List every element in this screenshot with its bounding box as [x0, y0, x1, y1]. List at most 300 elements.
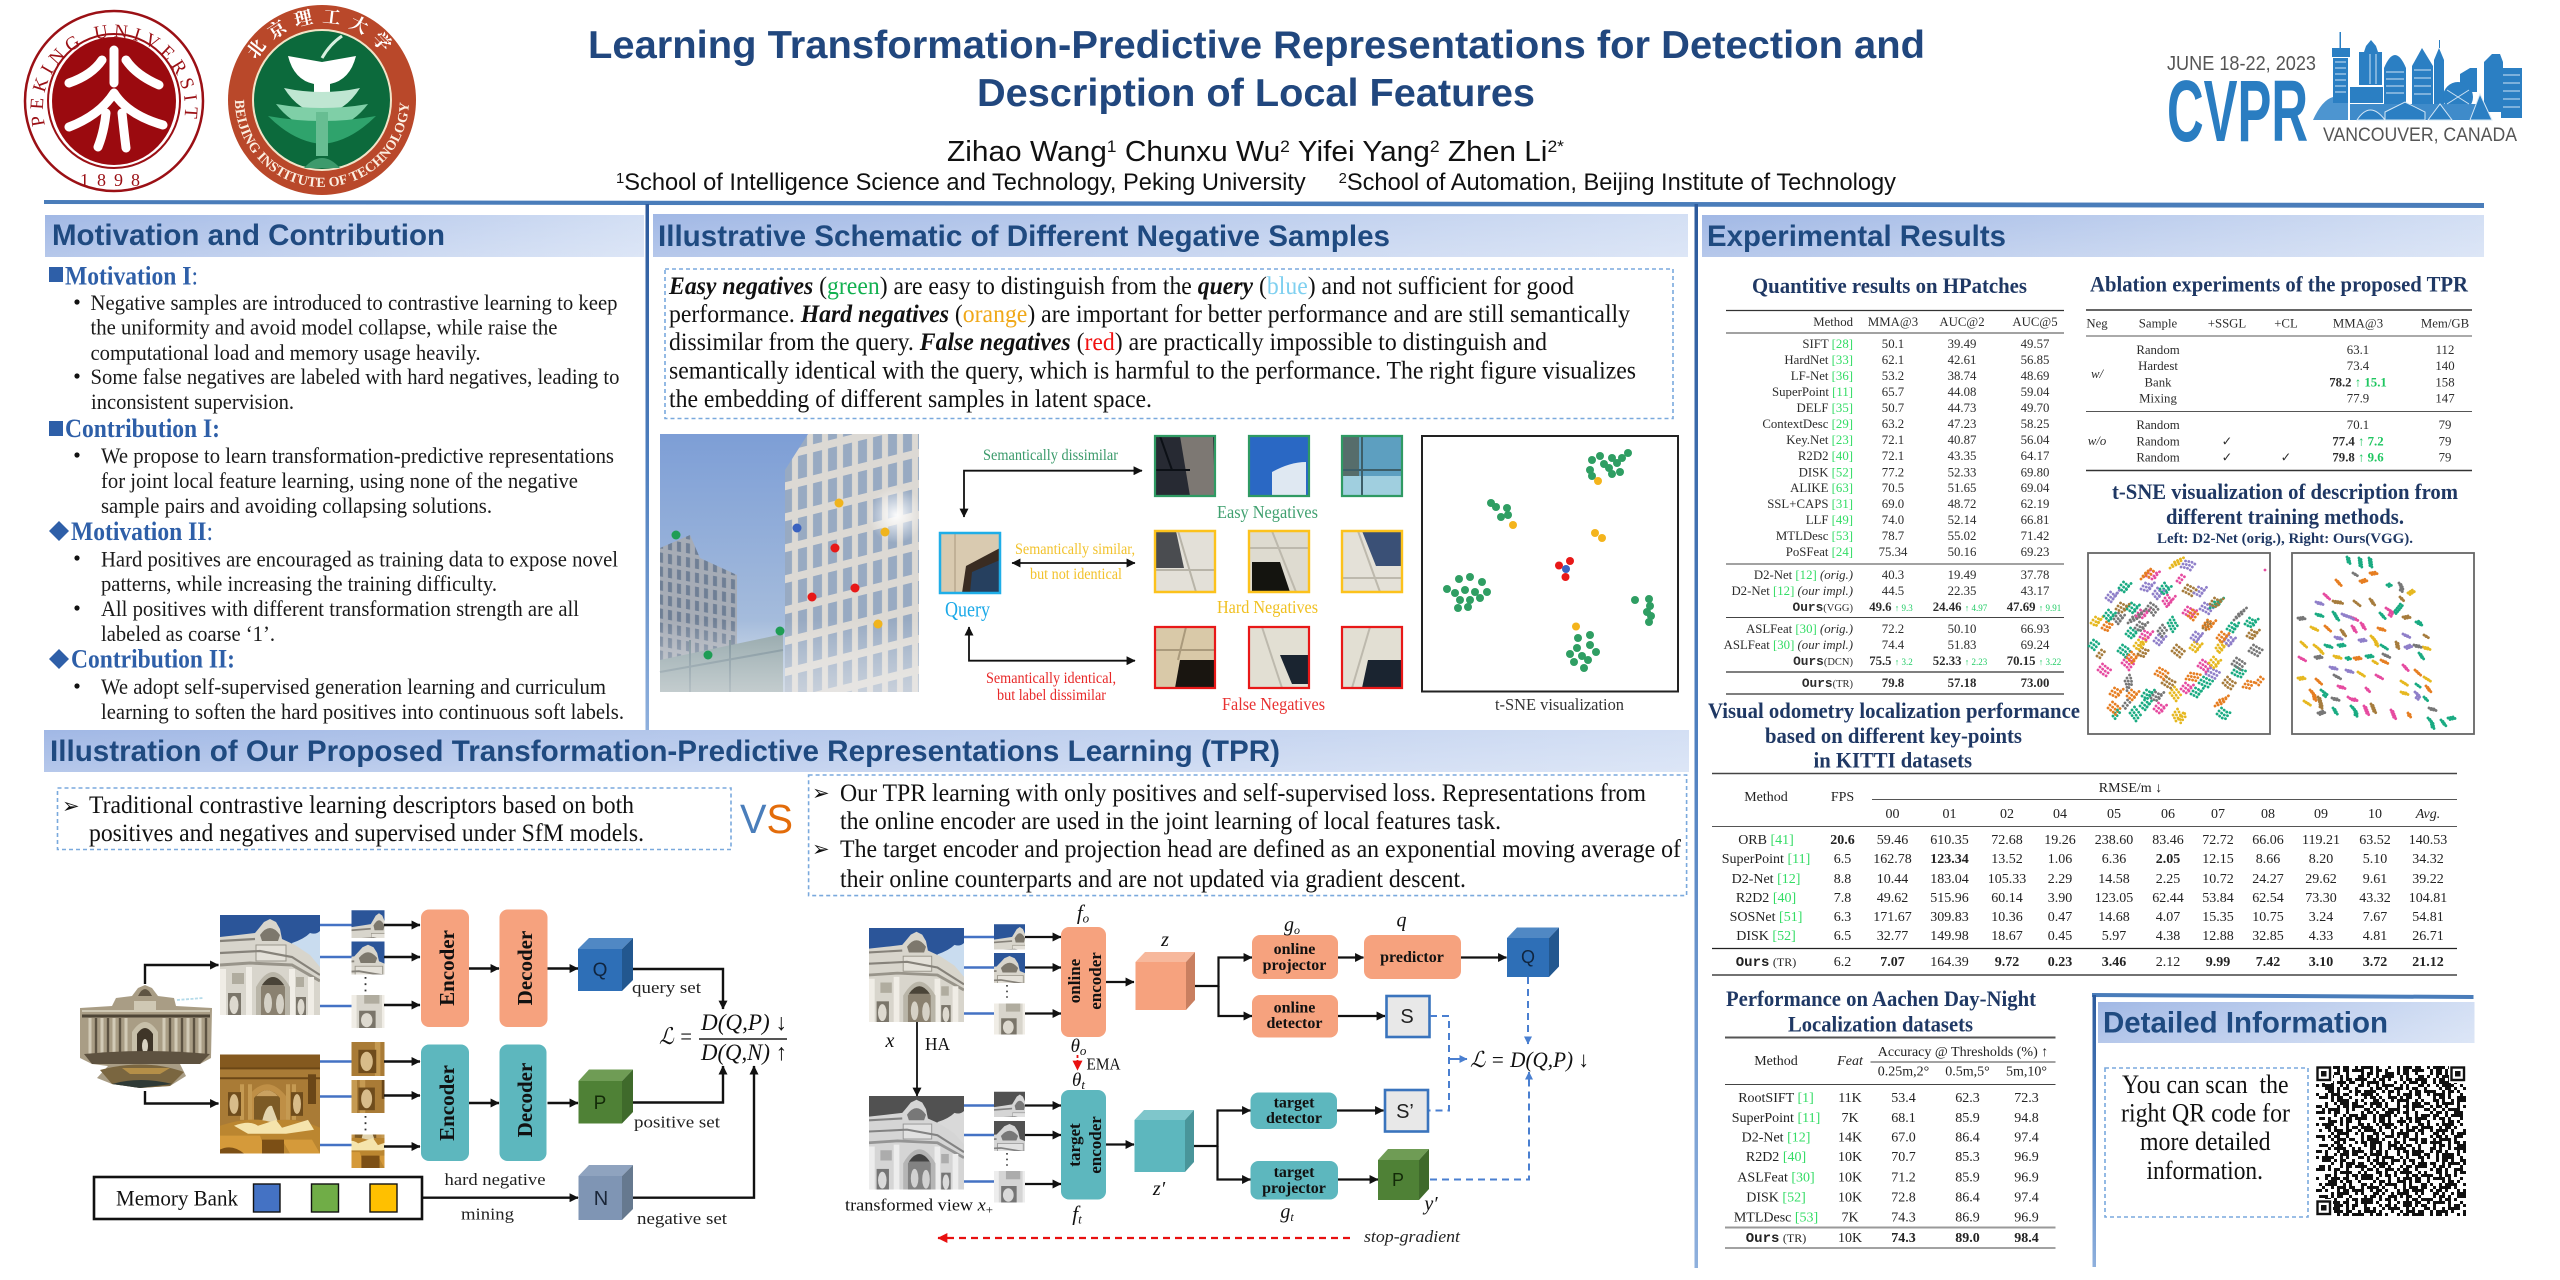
table: Aachen Day-Night: 67.0 [1891, 1130, 1916, 1146]
table: HPatches results: HardNet [33] [1784, 353, 1853, 367]
table: KITTI visual odometry: 8.8 [1834, 872, 1851, 887]
text box: scan prompt [2105, 1068, 2308, 1217]
table: Aachen Day-Night: 7K [1841, 1210, 1859, 1226]
table: HPatches results: Ours(DCN) [1793, 654, 1853, 669]
contribution II [49, 644, 624, 724]
table: HPatches results: 47.23 [1948, 417, 1976, 431]
set labels: mining [461, 1204, 515, 1224]
table: KITTI visual odometry: 6.5 [1834, 929, 1851, 944]
text box: traditional contrastive learning: positives and negatives and supervised under SfM models. [89, 820, 644, 847]
table: Aachen Day-Night: Method [1754, 1054, 1798, 1069]
image patches [261, 910, 485, 1168]
table: KITTI visual odometry: 21.12 [2412, 955, 2444, 970]
table: Aachen Day-Night: Localization datasets [1788, 1012, 1973, 1036]
easy negatives [1155, 436, 1402, 522]
table: HPatches results: 50.7 [1882, 401, 1905, 415]
relation arrows and labels: but not identical [1030, 566, 1122, 583]
table: KITTI visual odometry: 6.5 [1834, 852, 1851, 867]
table: HPatches results: 62.1 [1882, 353, 1904, 367]
table: ablation experiments: 70.1 [2347, 418, 2369, 432]
cube: Q query set [578, 938, 633, 991]
table: HPatches results: 78.7 [1882, 529, 1905, 543]
table: KITTI visual odometry: 610.35 [1930, 833, 1969, 848]
diagram symbols: g [1280, 1201, 1290, 1223]
table: Aachen Day-Night: 97.4 [2014, 1130, 2039, 1146]
table: Aachen Day-Night: 86.4 [1955, 1130, 1980, 1146]
table: KITTI visual odometry: 14.58 [2098, 872, 2130, 887]
text box: scan prompt: right QR code for [2121, 1098, 2290, 1128]
table: HPatches results: MTLDesc [53] [1776, 529, 1853, 543]
cube: Q output [1507, 928, 1559, 977]
chart: t-SNE visualization [1422, 436, 1678, 714]
text box: traditional contrastive learning [58, 788, 731, 850]
heading: motivation and contribution [45, 215, 644, 257]
table: HPatches results: 22.35 [1948, 584, 1976, 598]
table: ablation experiments: MMA@3 [2333, 316, 2383, 330]
title [588, 24, 1925, 115]
table: KITTI visual odometry: 105.33 [1988, 872, 2026, 887]
authors: 2 [1280, 137, 1290, 156]
table: Aachen Day-Night: 96.9 [2014, 1210, 2039, 1226]
set labels: query set [632, 978, 701, 997]
block: bottom encoder: Encoder [435, 1065, 459, 1141]
contribution II: We adopt self-supervised generation learning and curriculum [101, 674, 606, 699]
VS mark: VS [740, 796, 793, 842]
table: KITTI visual odometry: 10.36 [1991, 910, 2023, 925]
photo: buildings with sample points [660, 434, 924, 692]
table: HPatches results: 72.2 [1882, 622, 1904, 636]
table: Aachen Day-Night: 89.0 [1955, 1231, 1980, 1246]
table: Aachen Day-Night: RootSIFT [1] [1738, 1091, 1814, 1106]
table: Aachen Day-Night: 85.3 [1955, 1150, 1980, 1165]
table: KITTI visual odometry: 62.54 [2252, 891, 2284, 906]
table: KITTI visual odometry: 34.32 [2412, 852, 2444, 867]
table: KITTI visual odometry: 5.10 [2363, 852, 2387, 867]
box: S prime: S’ [1396, 1101, 1414, 1123]
table: ablation experiments: +CL [2274, 316, 2298, 330]
table: HPatches results: R2D2 [40] [1798, 449, 1853, 463]
authors: 2 [1430, 137, 1440, 156]
text box: TPR learning: ➢ [812, 837, 830, 861]
table: KITTI visual odometry: 73.30 [2305, 891, 2337, 906]
relation arrows and labels: but label dissimilar [997, 687, 1107, 704]
table: KITTI visual odometry: 10.72 [2202, 872, 2234, 887]
formula: contrastive loss: D(Q,N) ↑ [700, 1040, 787, 1065]
block: online detector: online [1274, 1000, 1315, 1016]
block: top decoder [500, 910, 548, 1027]
table: KITTI visual odometry: 29.62 [2305, 872, 2337, 887]
table: HPatches results: 59.04 [2021, 385, 2050, 399]
table: KITTI visual odometry: 07 [2211, 807, 2225, 822]
block: online encoder [1061, 927, 1106, 1037]
table: KITTI visual odometry: 12.15 [2202, 852, 2234, 867]
table: KITTI visual odometry: 104.81 [2409, 891, 2447, 906]
cube: P output: P [1392, 1170, 1404, 1190]
table: KITTI visual odometry: 4.07 [2156, 910, 2180, 925]
diagram symbols: y′ [1422, 1193, 1438, 1215]
dashed loss connectors [1429, 977, 1529, 1180]
table: ablation experiments: Mem/GB [2421, 316, 2469, 330]
table: HPatches results: 44.5 [1882, 584, 1904, 598]
table: KITTI visual odometry: 183.04 [1930, 872, 1969, 887]
table: ablation experiments: 77.4 ↑ 7.2 [2332, 434, 2384, 448]
table: HPatches results: 56.85 [2021, 353, 2049, 367]
table: KITTI visual odometry: 43.32 [2359, 891, 2391, 906]
table: KITTI visual odometry: 12.88 [2202, 929, 2234, 944]
diagram symbols: o [1294, 923, 1300, 937]
cube: N negative set [578, 1165, 633, 1220]
diagram symbols: z [1160, 929, 1169, 951]
table: KITTI visual odometry: 0.45 [2048, 929, 2072, 944]
text box: negative sample definitions: Easy negatives (green) are easy to distinguish from the query (blue) and not sufficient for good [668, 273, 1574, 300]
table: KITTI visual odometry: 4.81 [2363, 929, 2387, 944]
table: KITTI visual odometry: 53.84 [2202, 891, 2234, 906]
set labels: hard negative [444, 1170, 546, 1189]
contribution I [49, 414, 614, 518]
table: KITTI visual odometry: 14.68 [2098, 910, 2130, 925]
logo: Beijing Institute of Technology: BEIJING INSTITUTE OF TECHNOLOGY [234, 100, 409, 187]
table: KITTI visual odometry: DISK [52] [1736, 929, 1796, 944]
table: KITTI visual odometry: 10 [2368, 807, 2382, 822]
table: KITTI visual odometry: 72.72 [2202, 833, 2234, 848]
table: KITTI visual odometry: 6.2 [1834, 955, 1851, 970]
logo: Peking University [24, 10, 204, 192]
text box: negative sample definitions: semantically identical with the query, which is harmful to the performance. The right figure visualizes [669, 358, 1636, 384]
table: KITTI visual odometry: 123.05 [2095, 891, 2133, 906]
table: HPatches results: 44.73 [1948, 401, 1976, 415]
table: Aachen Day-Night: 10K [1838, 1170, 1862, 1186]
table: KITTI visual odometry: 02 [2000, 807, 2014, 822]
table: Aachen Day-Night: ASLFeat [30] [1737, 1170, 1815, 1186]
panel: detailed information [2092, 993, 2474, 1267]
image patches [966, 924, 1111, 1202]
table: Aachen Day-Night: MTLDesc [53] [1734, 1210, 1818, 1226]
table: ablation experiments: Random [2136, 343, 2180, 357]
block: target projector: projector [1262, 1180, 1326, 1197]
table: HPatches results: 52.33 [1948, 466, 1976, 480]
table: KITTI visual odometry: 3.46 [2102, 955, 2126, 970]
table: ablation experiments: Sample [2139, 316, 2178, 330]
block: online projector: online [1274, 941, 1315, 958]
diagram: traditional contrastive pipeline [80, 910, 787, 1228]
heading: TPR illustration: Illustration of Our Proposed Transformation-Predictive Representations Learning (TPR) [50, 735, 1280, 768]
table: HPatches results: 62.19 [2021, 497, 2049, 511]
table: ablation experiments: 79.8 ↑ 9.6 [2332, 450, 2384, 464]
authors: 1 [1107, 137, 1117, 156]
block: online projector [1252, 935, 1338, 979]
table: HPatches results: Ours(TR) [1802, 676, 1853, 691]
heading: t-SNE description visualization [2112, 479, 2458, 547]
table: HPatches results: 50.10 [1948, 622, 1976, 636]
text box: scan prompt: information. [2146, 1156, 2263, 1185]
block: online detector: detector [1267, 1015, 1322, 1032]
diagram symbols: θ [1071, 1036, 1080, 1057]
table: HPatches results [1724, 273, 2064, 694]
table: KITTI visual odometry: 4.38 [2156, 929, 2180, 944]
motivation II: patterns, while increasing the training difficulty. [101, 571, 497, 596]
table: Aachen Day-Night: 96.9 [2014, 1150, 2039, 1165]
table: ablation experiments: Random [2136, 434, 2180, 448]
cube: z prime [1134, 1110, 1194, 1172]
table: KITTI visual odometry: 9.61 [2363, 872, 2387, 887]
table: KITTI visual odometry: 7.67 [2363, 910, 2387, 925]
table: KITTI visual odometry: 00 [1886, 807, 1900, 822]
diagram symbols: q [1396, 910, 1406, 932]
table: KITTI visual odometry: 2.29 [2048, 872, 2072, 887]
logo: CVPR 2023: VANCOUVER, CANADA [2323, 125, 2517, 146]
table: HPatches results: 75.5 ↑ 3.2 [1869, 654, 1913, 668]
table: HPatches results: 42.61 [1948, 353, 1976, 367]
table: HPatches results: D2-Net [12] (orig.) [1754, 568, 1853, 582]
table: Aachen Day-Night: 68.1 [1891, 1111, 1916, 1126]
table: KITTI visual odometry: 60.14 [1991, 891, 2023, 906]
table: HPatches results: Method [1813, 315, 1854, 329]
set labels: positive set [634, 1112, 720, 1132]
table: Aachen Day-Night: 11K [1838, 1091, 1862, 1106]
table: HPatches results: 51.65 [1948, 481, 1976, 495]
table: ablation experiments: Random [2136, 450, 2180, 464]
cube: Q query set: Q [593, 960, 607, 981]
text box: scan prompt: You can scan the [2122, 1070, 2288, 1099]
table: HPatches results: 70.15 ↑ 3.22 [2007, 654, 2061, 668]
table: Aachen Day-Night: 71.2 [1891, 1170, 1916, 1186]
table: HPatches results: 69.0 [1882, 497, 1904, 511]
panel: experimental results [1702, 215, 2484, 1248]
table: ablation experiments: w/ [2091, 367, 2104, 381]
table: KITTI visual odometry: 3.72 [2363, 955, 2387, 970]
table: Aachen Day-Night: 74.3 [1891, 1231, 1916, 1246]
table: HPatches results: ContextDesc [29] [1762, 417, 1853, 431]
diagram symbols: x [885, 1030, 895, 1052]
table: KITTI visual odometry: 26.71 [2412, 929, 2444, 944]
motivation II: Hard positives are encouraged as training data to expose novel [101, 546, 618, 572]
table: HPatches results: 66.81 [2021, 513, 2049, 527]
title: Description of Local Features [977, 72, 1535, 115]
block: target detector: detector [1266, 1110, 1322, 1127]
table: ablation experiments: 158 [2435, 376, 2455, 390]
table: KITTI visual odometry: ORB [41] [1738, 833, 1794, 848]
table: HPatches results: 19.49 [1948, 568, 1976, 582]
affiliations: 1 [616, 170, 624, 187]
set labels [444, 978, 727, 1228]
text box: traditional contrastive learning: ➢ [62, 794, 80, 818]
box: S prime [1385, 1090, 1428, 1132]
table: HPatches results: 55.02 [1948, 529, 1976, 543]
table: KITTI visual odometry: 01 [1942, 807, 1956, 822]
table: KITTI visual odometry: 20.6 [1830, 833, 1855, 848]
table: KITTI visual odometry: 7.8 [1834, 891, 1851, 906]
table: HPatches results: 58.25 [2021, 417, 2049, 431]
table: KITTI visual odometry: Avg. [2415, 807, 2440, 822]
table: KITTI visual odometry: 06 [2161, 807, 2175, 822]
easy negatives: Easy Negatives [1217, 502, 1318, 522]
table: HPatches results: 69.24 [2021, 638, 2050, 652]
motivation I: computational load and memory usage heavily. [90, 340, 480, 365]
motivation I: Some false negatives are labeled with hard negatives, leading to [90, 364, 620, 389]
table: KITTI visual odometry: 2.05 [2156, 852, 2180, 867]
box: S [1386, 996, 1430, 1037]
table: KITTI visual odometry: 149.98 [1930, 929, 1969, 944]
block: online projector: projector [1263, 957, 1326, 974]
table: KITTI visual odometry: 4.33 [2309, 929, 2333, 944]
table: ablation experiments: 147 [2435, 392, 2455, 406]
heading: t-SNE description visualization: different training methods. [2166, 504, 2404, 529]
table: KITTI visual odometry: 140.53 [2409, 833, 2447, 848]
table: HPatches results: 69.80 [2021, 466, 2049, 480]
text box: TPR learning: ➢ [812, 781, 830, 805]
table: HPatches results: ASLFeat [30] (orig.) [1746, 622, 1853, 636]
diagram symbols: f [1072, 1202, 1078, 1226]
block: bottom decoder: Decoder [513, 1063, 537, 1137]
title: Learning Transformation-Predictive Representations for Detection and [588, 24, 1925, 67]
block: target detector [1250, 1092, 1337, 1129]
table: KITTI visual odometry: 3.10 [2309, 955, 2333, 970]
image: fountain point cloud [80, 985, 212, 1088]
chart: t-SNE Ours VGG [2292, 553, 2474, 734]
table: Aachen Day-Night: R2D2 [40] [1746, 1150, 1806, 1165]
table: Aachen Day-Night: Ours (TR) [1746, 1231, 1806, 1247]
table: KITTI visual odometry: 162.78 [1873, 852, 1912, 867]
motivation I: the uniformity and avoid model collapse, while raise the [90, 314, 558, 340]
table: KITTI visual odometry: 9.72 [1995, 955, 2019, 970]
table: HPatches results: 56.04 [2021, 433, 2050, 447]
table: HPatches results: AUC@2 [1939, 315, 1985, 329]
table: KITTI visual odometry: 309.83 [1930, 910, 1969, 925]
table: HPatches results: 57.18 [1948, 676, 1976, 690]
diagram symbols: g [1284, 914, 1294, 936]
contribution I: for joint local feature learning, using none of the negative [101, 468, 578, 493]
logo: Beijing Institute of Technology: 北京理工大学 [247, 8, 392, 58]
table: ablation experiments: ✓ [2222, 450, 2232, 466]
table: KITTI visual odometry: 238.60 [2095, 833, 2133, 848]
motivation II [49, 517, 618, 646]
table: KITTI visual odometry: 04 [2053, 807, 2067, 822]
cube: Q output: Q [1521, 947, 1535, 967]
affiliations: School of Automation, Beijing Institute of Technology [1347, 169, 1896, 196]
table: Aachen Day-Night: 70.7 [1891, 1150, 1916, 1165]
table: Aachen Day-Night: DISK [52] [1746, 1190, 1806, 1206]
table: HPatches results: 40.87 [1948, 433, 1977, 447]
contribution I: sample pairs and avoiding collapsing solutions. [101, 493, 492, 518]
table: KITTI visual odometry: 15.35 [2202, 910, 2234, 925]
diagram symbols: t [1290, 1210, 1294, 1224]
text box: scan prompt: more detailed [2140, 1127, 2270, 1156]
table: ablation experiments: ✓ [2222, 434, 2232, 450]
table: HPatches results: DELF [35] [1796, 401, 1853, 415]
heading: experimental results [1702, 215, 2484, 257]
table: HPatches results: 75.34 [1879, 545, 1908, 559]
table: HPatches results: 71.42 [2021, 529, 2049, 543]
diagram symbols: transformed view x [845, 1196, 985, 1214]
block: online encoder: encoder [1086, 952, 1105, 1010]
diagram symbols: z′ [1152, 1178, 1166, 1200]
table: Aachen Day-Night: 85.9 [1955, 1170, 1980, 1186]
block: target encoder: encoder [1086, 1116, 1105, 1174]
table: HPatches results: 39.49 [1948, 337, 1976, 351]
diagram symbols: o [1080, 1043, 1087, 1058]
block: target encoder [1061, 1090, 1106, 1200]
table: KITTI visual odometry: FPS [1831, 790, 1854, 805]
table: Aachen Day-Night: 10K [1838, 1150, 1862, 1165]
table: HPatches results: ASLFeat [30] (our impl.) [1724, 638, 1853, 652]
table: KITTI visual odometry: 1.06 [2048, 852, 2072, 867]
table: KITTI visual odometry: 54.81 [2412, 910, 2444, 925]
table: ablation experiments: 140 [2435, 359, 2455, 373]
table: Aachen Day-Night [1725, 986, 2056, 1248]
table: KITTI visual odometry: 8.66 [2256, 852, 2280, 867]
table: KITTI visual odometry: 63.52 [2359, 833, 2391, 848]
heading: illustrative schematic [653, 214, 1688, 257]
panel: motivation and contribution [45, 215, 644, 724]
contribution I: We propose to learn transformation-predictive representations [101, 443, 614, 468]
table: ablation experiments: 73.4 [2347, 359, 2370, 373]
table: KITTI visual odometry: R2D2 [40] [1736, 891, 1796, 906]
block: bottom decoder [500, 1044, 546, 1161]
table: HPatches results: 53.2 [1882, 369, 1904, 383]
table: Aachen Day-Night: 0.25m,2° [1878, 1064, 1929, 1080]
block: online detector [1252, 995, 1338, 1038]
table: Aachen Day-Night: 72.8 [1891, 1190, 1916, 1206]
text box: negative sample definitions [665, 269, 1673, 418]
table: HPatches results: 51.83 [1948, 638, 1976, 652]
table: HPatches results: 72.1 [1882, 433, 1904, 447]
table: HPatches results: MMA@3 [1868, 315, 1918, 329]
formula: TPR loss: ℒ = D(Q,P) ↓ [1470, 1047, 1589, 1072]
table: KITTI visual odometry: Visual odometry localization performance [1708, 698, 2080, 723]
false negatives: False Negatives [1222, 694, 1325, 714]
table: HPatches results: 40.3 [1882, 568, 1904, 582]
table: KITTI visual odometry: 123.34 [1930, 852, 1969, 867]
motivation II: Motivation II: [71, 517, 213, 546]
table: Aachen Day-Night: 72.3 [2014, 1091, 2039, 1106]
memory bank [94, 1177, 422, 1219]
table: ablation experiments: ✓ [2281, 450, 2291, 466]
table: HPatches results: 63.2 [1882, 417, 1904, 431]
table: KITTI visual odometry: 10.44 [1877, 872, 1908, 887]
table: ablation experiments: +SSGL [2208, 316, 2246, 330]
diagram symbols: f [1077, 900, 1083, 924]
table: Aachen Day-Night: 10K [1838, 1190, 1862, 1206]
table: Aachen Day-Night: 86.4 [1955, 1190, 1980, 1206]
query patch [940, 533, 1000, 622]
hard negatives: Hard Negatives [1217, 597, 1318, 617]
motivation II: labeled as coarse ‘1’. [101, 621, 275, 646]
query patch: Query [945, 596, 990, 622]
table: KITTI visual odometry: 08 [2261, 807, 2275, 822]
table: KITTI visual odometry: 19.26 [2044, 833, 2076, 848]
table: HPatches results: 52.33 ↑ 2.23 [1933, 654, 1988, 668]
text box: TPR learning: The target encoder and projection head are defined as an exponential moving average of [840, 836, 1682, 863]
text box: TPR learning [809, 775, 1687, 896]
block: target projector: target [1274, 1164, 1315, 1181]
table: KITTI visual odometry: Ours (TR) [1736, 955, 1796, 971]
QR code [2316, 1066, 2466, 1216]
relation arrows and labels: Semantically similar, [1015, 541, 1135, 558]
table: KITTI visual odometry: D2-Net [12] [1732, 872, 1800, 887]
table: HPatches results: 74.0 [1882, 513, 1904, 527]
heading: experimental results: Experimental Results [1707, 220, 2006, 253]
diagram symbols: o [1083, 910, 1090, 926]
table: ablation experiments: 79 [2439, 418, 2451, 432]
table: HPatches results: 79.8 [1882, 676, 1904, 690]
table: KITTI visual odometry: 83.46 [2152, 833, 2184, 848]
table: KITTI visual odometry: 6.3 [1834, 910, 1851, 925]
table: Aachen Day-Night: Performance on Aachen Day-Night [1726, 986, 2037, 1011]
logo: CVPR 2023: JUNE 18-22, 2023 [2167, 53, 2316, 75]
table: Aachen Day-Night: SuperPoint [11] [1732, 1111, 1820, 1126]
heading: illustrative schematic: Illustrative Schematic of Different Negative Samples [658, 220, 1390, 253]
text box: negative sample definitions: dissimilar from the query. False negatives (red) are practically impossible to distinguish and [669, 329, 1547, 356]
